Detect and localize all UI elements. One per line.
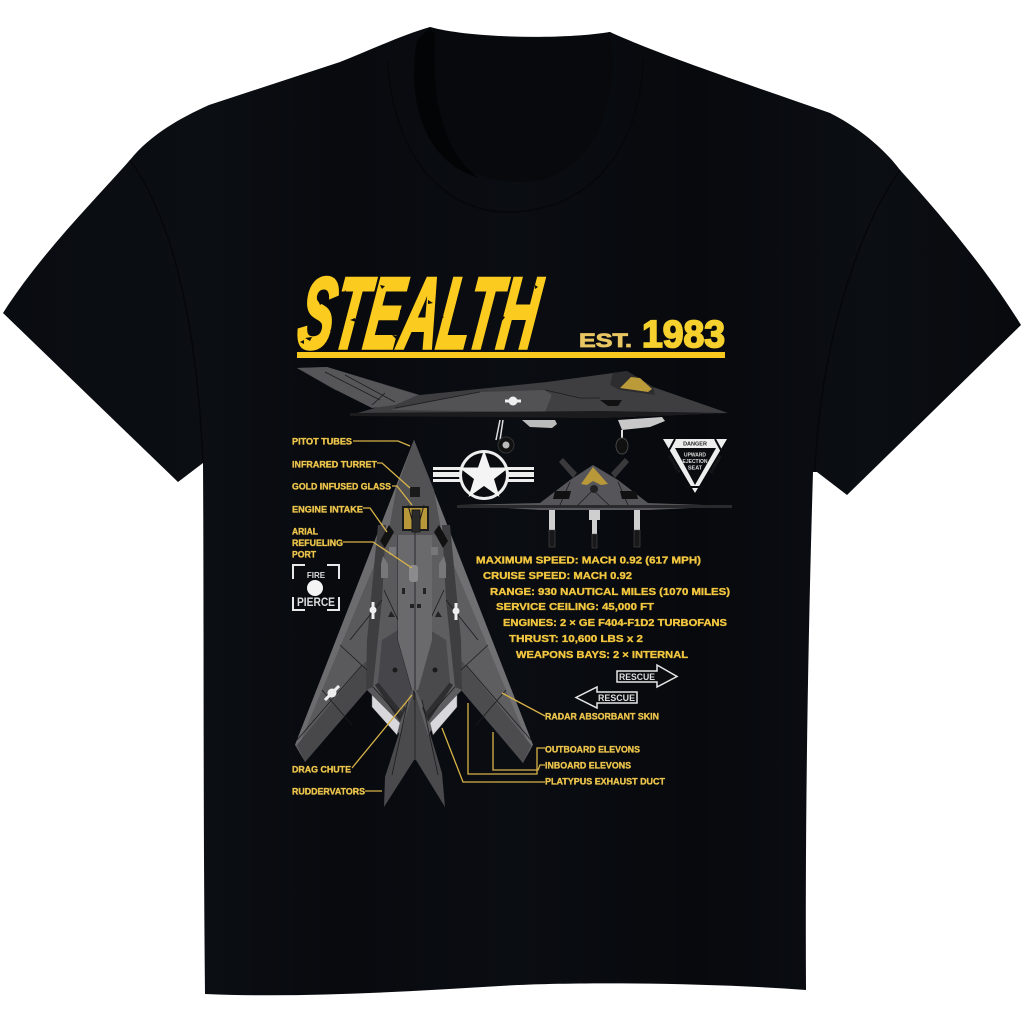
plan canopy gold — [403, 507, 428, 530]
callout labels left: RUDDERVATORS — [292, 786, 365, 798]
ejection seat danger triangle: EJECTION — [682, 459, 708, 465]
ejection seat danger triangle: DANGER — [667, 455, 682, 475]
left half — [295, 440, 414, 762]
callout labels right: PLATYPUS EXHAUST DUCT — [545, 776, 665, 788]
leader lines — [343, 441, 545, 791]
specifications — [476, 554, 730, 661]
callout labels left — [292, 436, 391, 798]
left exhaust — [372, 695, 400, 735]
ejection seat danger triangle: DANGER — [683, 442, 707, 448]
ejection seat danger triangle: DANGER — [709, 454, 723, 474]
fire pierce reticle: PIERCE — [297, 597, 335, 609]
fuselage — [398, 530, 432, 690]
engine intakes — [380, 525, 448, 548]
title: STEALTH — [292, 257, 549, 370]
title: STEALTH: STEALTH — [292, 257, 549, 370]
fire pierce reticle — [293, 565, 339, 610]
callout labels left: GOLD INFUSED GLASS — [292, 482, 391, 492]
specifications: MAXIMUM SPEED: MACH 0.92 (617 MPH) — [476, 554, 701, 566]
side canopy gold — [620, 377, 652, 392]
rescue arrow right — [617, 665, 677, 687]
specifications: ENGINES: 2 × GE F404-F1D2 TURBOFANS — [503, 617, 727, 629]
est. 1983 — [579, 314, 725, 356]
callout labels left: PORT — [292, 550, 316, 560]
callout labels left: PITOT TUBES — [292, 436, 352, 448]
specifications: RANGE: 930 NAUTICAL MILES (1070 MILES) — [490, 586, 730, 598]
title rule — [297, 352, 725, 358]
callout labels right — [545, 712, 665, 788]
side view aircraft — [297, 367, 728, 454]
rescue arrow right: RESCUE — [619, 672, 655, 682]
callout labels right: OUTBOARD ELEVONS — [545, 744, 640, 756]
ejection seat danger triangle: UPWARD — [684, 452, 706, 458]
landing gear side — [496, 417, 665, 454]
callout labels right: INBOARD ELEVONS — [545, 760, 631, 772]
front landing gear — [549, 510, 640, 548]
side roundel — [505, 396, 521, 406]
ejection seat danger triangle: SEAT — [688, 466, 703, 472]
est. 1983: EST. — [579, 331, 632, 352]
right half — [414, 440, 533, 763]
callout labels left: ENGINE INTAKE — [292, 504, 363, 516]
right exhaust — [430, 695, 457, 735]
specifications: WEAPONS BAYS: 2 × INTERNAL — [516, 649, 689, 661]
refueling port — [409, 565, 418, 582]
specifications: THRUST: 10,600 LBS x 2 — [509, 633, 643, 645]
national insignia roundel — [433, 450, 534, 500]
callout labels left: DRAG CHUTE — [292, 764, 351, 776]
specifications: SERVICE CEILING: 45,000 FT — [496, 601, 655, 613]
est. 1983: 1983 — [642, 314, 725, 356]
plan view aircraft — [295, 440, 533, 807]
specifications: CRUISE SPEED: MACH 0.92 — [483, 570, 632, 582]
callout labels left: REFUELING — [292, 538, 343, 549]
ejection seat danger triangle — [663, 439, 727, 493]
tails — [384, 693, 445, 807]
callout labels left: ARIAL — [292, 526, 318, 538]
callout labels left: INFRARED TURRET — [292, 460, 377, 470]
front view aircraft — [457, 458, 732, 548]
infrared turret — [410, 487, 420, 497]
rescue arrow left — [576, 687, 637, 708]
fire pierce reticle: FIRE — [307, 571, 326, 580]
plan view insignia — [324, 602, 460, 701]
rescue arrow left: RESCUE — [598, 693, 635, 703]
callout labels right: RADAR ABSORBANT SKIN — [545, 712, 659, 722]
